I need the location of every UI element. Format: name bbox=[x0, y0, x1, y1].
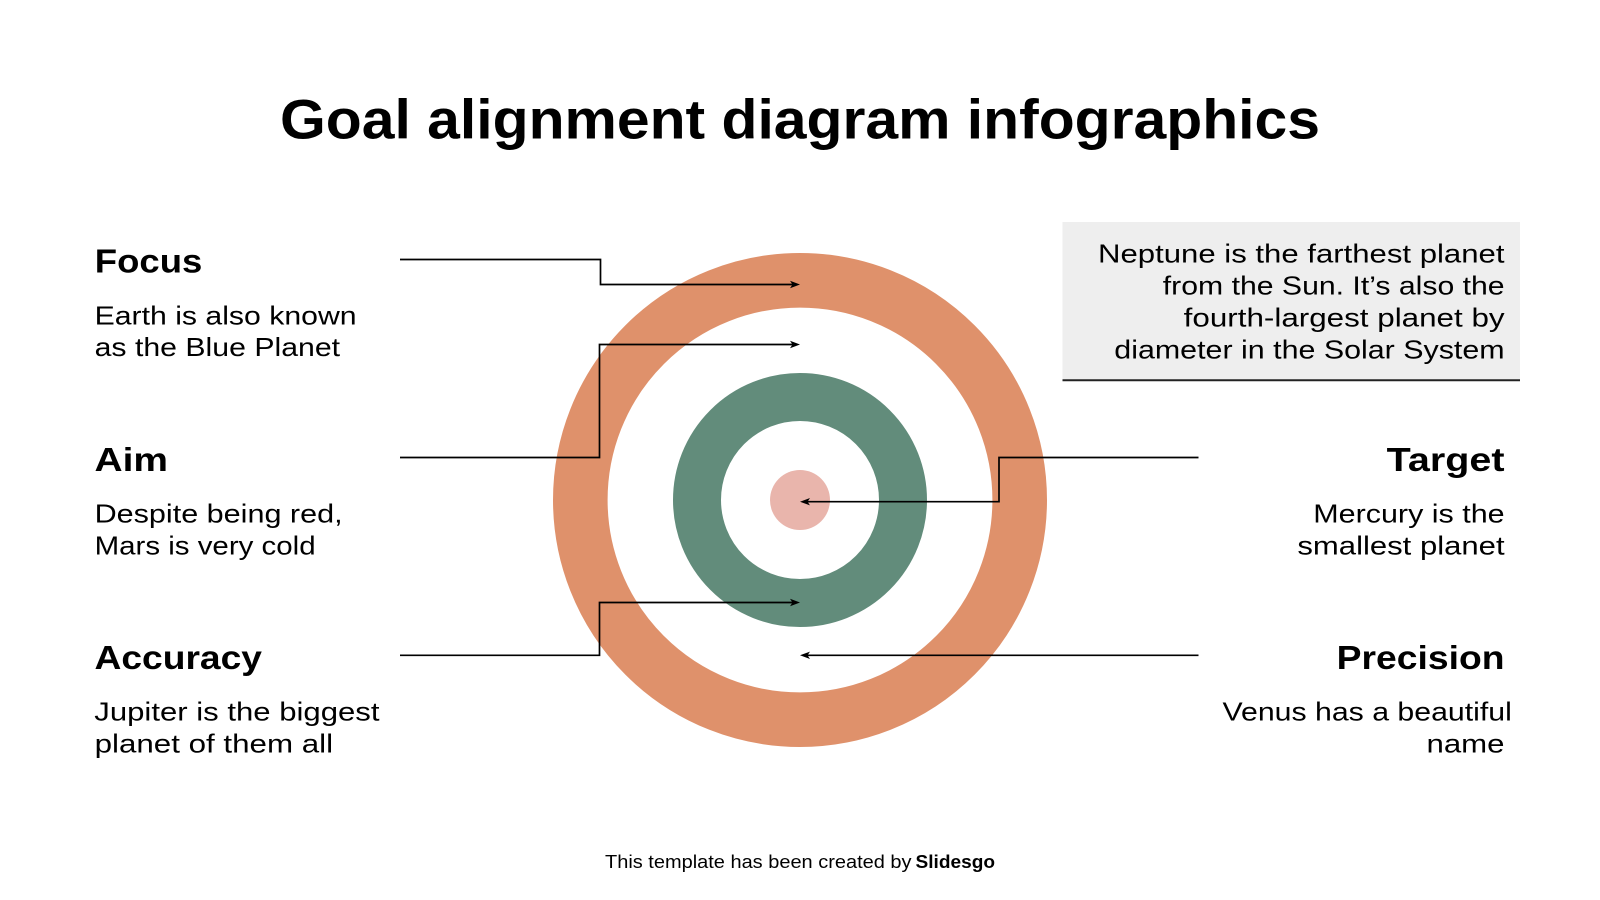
callout: Neptune: from the Sun. It’s also the bbox=[1163, 270, 1505, 300]
footer credit: Slidesgo bbox=[916, 852, 995, 872]
block: Focus: Focus bbox=[95, 242, 202, 280]
target diagram bbox=[580, 280, 1020, 720]
block: Aim: Mars is very cold bbox=[95, 531, 316, 561]
block: Target: Mercury is the bbox=[1313, 498, 1505, 528]
block: Precision: Precision bbox=[1337, 639, 1504, 676]
block: Aim: Despite being red, bbox=[95, 498, 343, 528]
block: Accuracy: planet of them all bbox=[95, 729, 333, 759]
block: Precision: name bbox=[1426, 729, 1504, 759]
arrow: Aim bbox=[400, 341, 800, 458]
callout: Neptune: diameter in the Solar System bbox=[1114, 334, 1505, 364]
title: Goal alignment diagram infographics bbox=[280, 88, 1320, 150]
arrow: Precision bbox=[800, 652, 1198, 659]
block: Focus: as the Blue Planet bbox=[95, 332, 341, 362]
arrow: Target bbox=[800, 458, 1198, 505]
block: Focus: Earth is also known bbox=[95, 300, 357, 330]
footer credit: This template has been created by bbox=[605, 852, 912, 872]
callout: Neptune: Neptune is the farthest planet bbox=[1098, 238, 1505, 268]
outer ring bbox=[580, 280, 1020, 720]
callout: Neptune: fourth-largest planet by bbox=[1184, 302, 1505, 332]
block: Target: smallest planet bbox=[1297, 531, 1506, 561]
arrow: Focus bbox=[400, 260, 800, 288]
block: Aim: Aim bbox=[94, 441, 168, 478]
callout: Neptune bbox=[1062, 222, 1520, 380]
middle ring bbox=[697, 397, 903, 603]
block: Target bbox=[1297, 441, 1506, 561]
block: Focus bbox=[95, 242, 357, 362]
bullseye bbox=[770, 470, 830, 530]
block: Precision: Venus has a beautiful bbox=[1222, 696, 1512, 726]
block: Aim bbox=[94, 441, 343, 561]
block: Accuracy: Jupiter is the biggest bbox=[94, 696, 380, 726]
arrow: Accuracy bbox=[400, 599, 800, 655]
block: Accuracy bbox=[94, 639, 380, 759]
block: Target: Target bbox=[1387, 441, 1505, 478]
block: Precision bbox=[1222, 639, 1512, 759]
block: Accuracy: Accuracy bbox=[94, 639, 263, 676]
